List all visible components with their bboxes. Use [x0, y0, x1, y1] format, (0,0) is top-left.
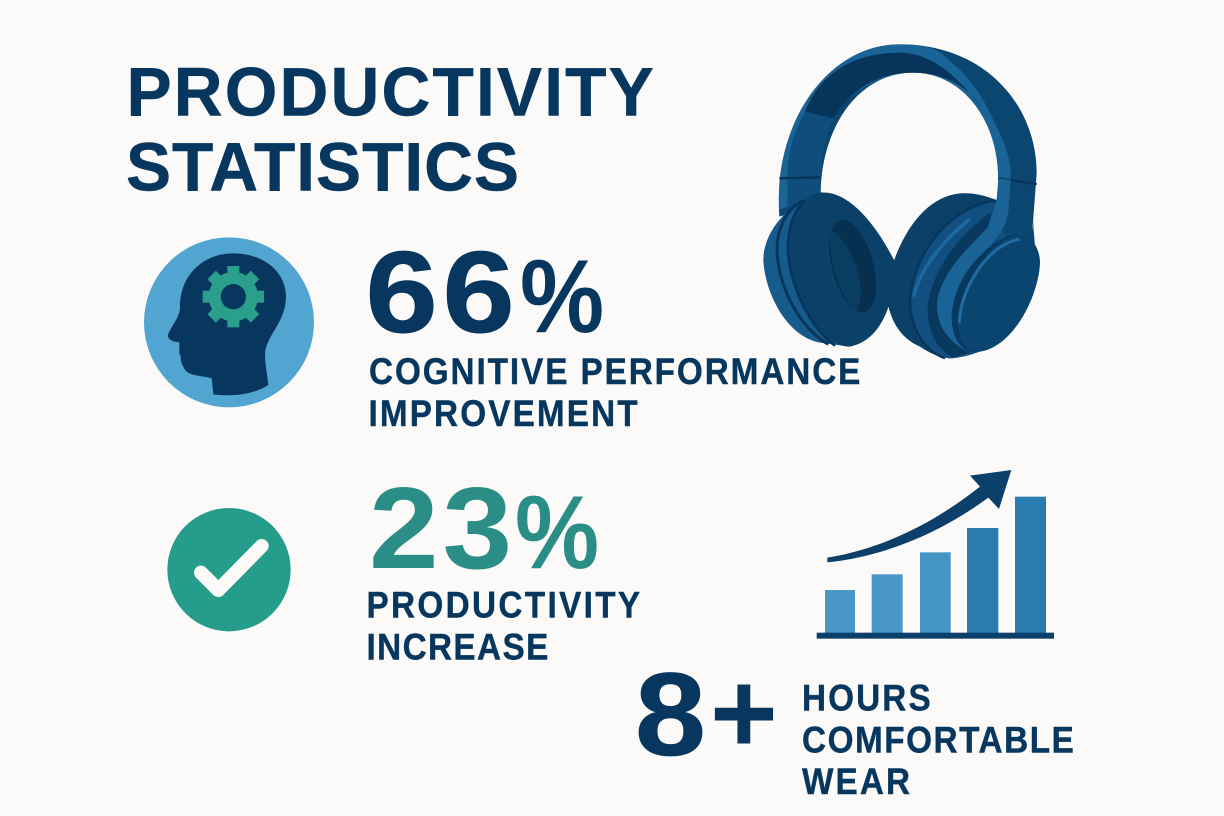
label: productivity increase: [366, 585, 640, 668]
value: 66%: [366, 228, 604, 357]
label: productivity increase: INCREASE: [366, 627, 548, 668]
arrow: [827, 470, 1011, 562]
value: 8+: 8: [635, 649, 706, 781]
value: 23%: 23: [369, 463, 516, 593]
title: STATISTICS: [126, 129, 519, 206]
value: 23%: %: [515, 475, 599, 591]
value: 66%: 66: [366, 228, 519, 357]
icon: headphones: [763, 44, 1040, 358]
value: 23%: [369, 463, 599, 593]
label: productivity increase: PRODUCTIVITY: [366, 585, 640, 626]
stat: 23 percent productivity: [167, 463, 640, 668]
title: PRODUCTIVITY: [126, 54, 654, 131]
label: cognitive performance improvement: [368, 351, 860, 434]
label: hours comfortable wear: COMFORTABLE: [802, 720, 1074, 761]
icon: head with gear: [144, 237, 314, 407]
value: 8+: [635, 648, 778, 781]
label: cognitive performance improvement: COGNITIVE PERFORMANCE: [369, 351, 860, 392]
stat: 66 percent cognitive performance: [144, 228, 860, 434]
label: hours comfortable wear: [802, 678, 1074, 802]
label: hours comfortable wear: HOURS: [802, 678, 931, 719]
chart: rising bars with arrow: [817, 470, 1054, 639]
value: 8+: +: [710, 648, 778, 778]
label: cognitive performance improvement: IMPROVEMENT: [368, 393, 638, 434]
stat: 8+ hours comfortable wear: [635, 648, 1074, 802]
title: [126, 54, 654, 206]
label: hours comfortable wear: WEAR: [802, 761, 910, 802]
icon: check mark: [167, 508, 291, 631]
value: 66%: %: [520, 239, 604, 355]
